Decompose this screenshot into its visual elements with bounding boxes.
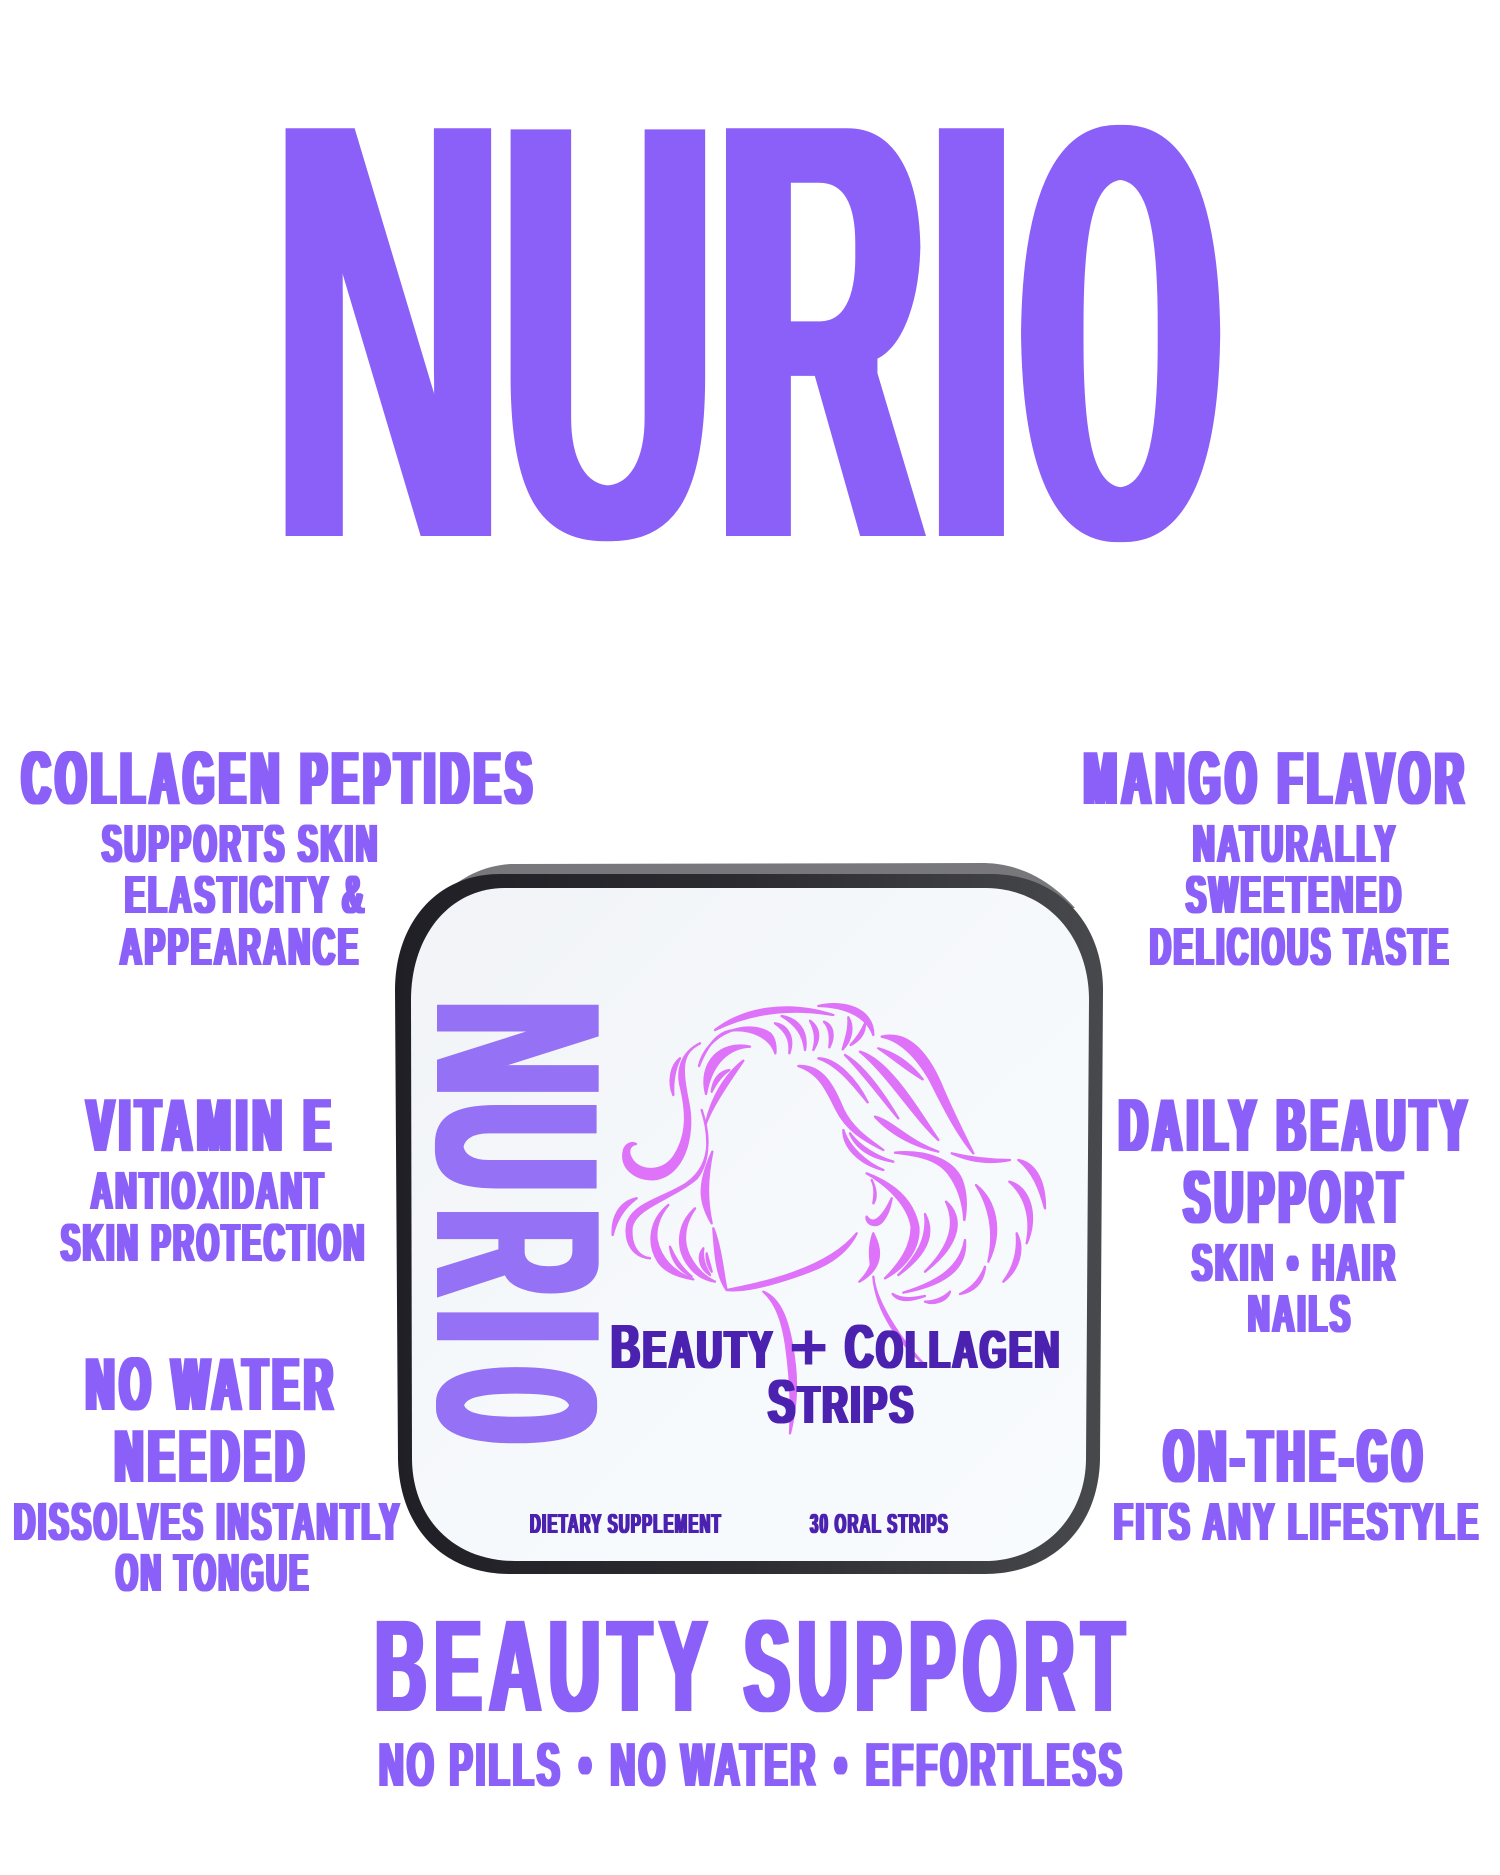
feature: collagen peptides: COLLAGEN PEPTIDES xyxy=(22,737,537,821)
package product name: STRIPS xyxy=(768,1367,916,1437)
feature: collagen peptides: ELASTICITY & xyxy=(125,865,367,925)
feature: no water needed: NEEDED xyxy=(115,1415,309,1499)
bottom headline: SUPPORT xyxy=(744,1592,1132,1739)
title: NURIO: O xyxy=(1007,9,1234,681)
package footer text: DIETARY SUPPLEMENT xyxy=(530,1508,722,1539)
bottom headline: BEAUTY xyxy=(375,1592,715,1739)
title: NURIO xyxy=(272,0,1234,681)
icon: woman's hair line art xyxy=(613,1004,1045,1433)
package product name: BEAUTY xyxy=(611,1312,775,1382)
feature: vitamin E xyxy=(61,1084,367,1273)
feature: daily beauty support xyxy=(1119,1084,1472,1344)
package product name xyxy=(611,1310,1062,1437)
feature: no water needed: DISSOLVES INSTANTLY xyxy=(14,1492,402,1552)
product package xyxy=(386,863,1103,1574)
feature: vitamin E: SKIN PROTECTION xyxy=(61,1213,367,1273)
package face xyxy=(411,888,1089,1561)
package vertical brand name: I xyxy=(387,1309,649,1344)
feature: collagen peptides: APPEARANCE xyxy=(120,917,361,977)
feature: collagen peptides: SUPPORTS SKIN xyxy=(102,814,380,874)
title: NURIO: I xyxy=(928,0,1015,674)
package product name: COLLAGEN xyxy=(845,1312,1062,1382)
feature: no water needed xyxy=(14,1343,402,1603)
bottom tagline: NO PILLS • NO WATER • EFFORTLESS xyxy=(379,1730,1125,1800)
feature: vitamin E: VITAMIN E xyxy=(87,1084,336,1168)
title: NURIO: U xyxy=(494,4,722,680)
package footer text: 30 ORAL STRIPS xyxy=(810,1508,949,1539)
package product name: + xyxy=(789,1310,828,1385)
title: NURIO: R xyxy=(719,0,924,674)
feature: vitamin E: ANTIOXIDANT xyxy=(91,1161,326,1221)
package vertical brand name: U xyxy=(386,1100,639,1194)
package rim xyxy=(432,863,1075,908)
title: NURIO: N xyxy=(272,0,505,673)
feature: daily beauty support: NAILS xyxy=(1248,1284,1353,1344)
package vertical brand name: N xyxy=(386,1001,648,1096)
package vertical brand name: O xyxy=(388,1364,635,1446)
feature: no water needed: ON TONGUE xyxy=(116,1543,311,1603)
package vertical brand name xyxy=(386,1001,649,1446)
feature: mango flavor xyxy=(1084,737,1469,977)
feature: collagen peptides xyxy=(22,737,537,977)
package edge xyxy=(395,874,1103,1574)
feature: no water needed: NO WATER xyxy=(86,1343,338,1427)
package vertical brand name: R xyxy=(387,1209,649,1295)
feature: on-the-go xyxy=(1114,1415,1481,1552)
